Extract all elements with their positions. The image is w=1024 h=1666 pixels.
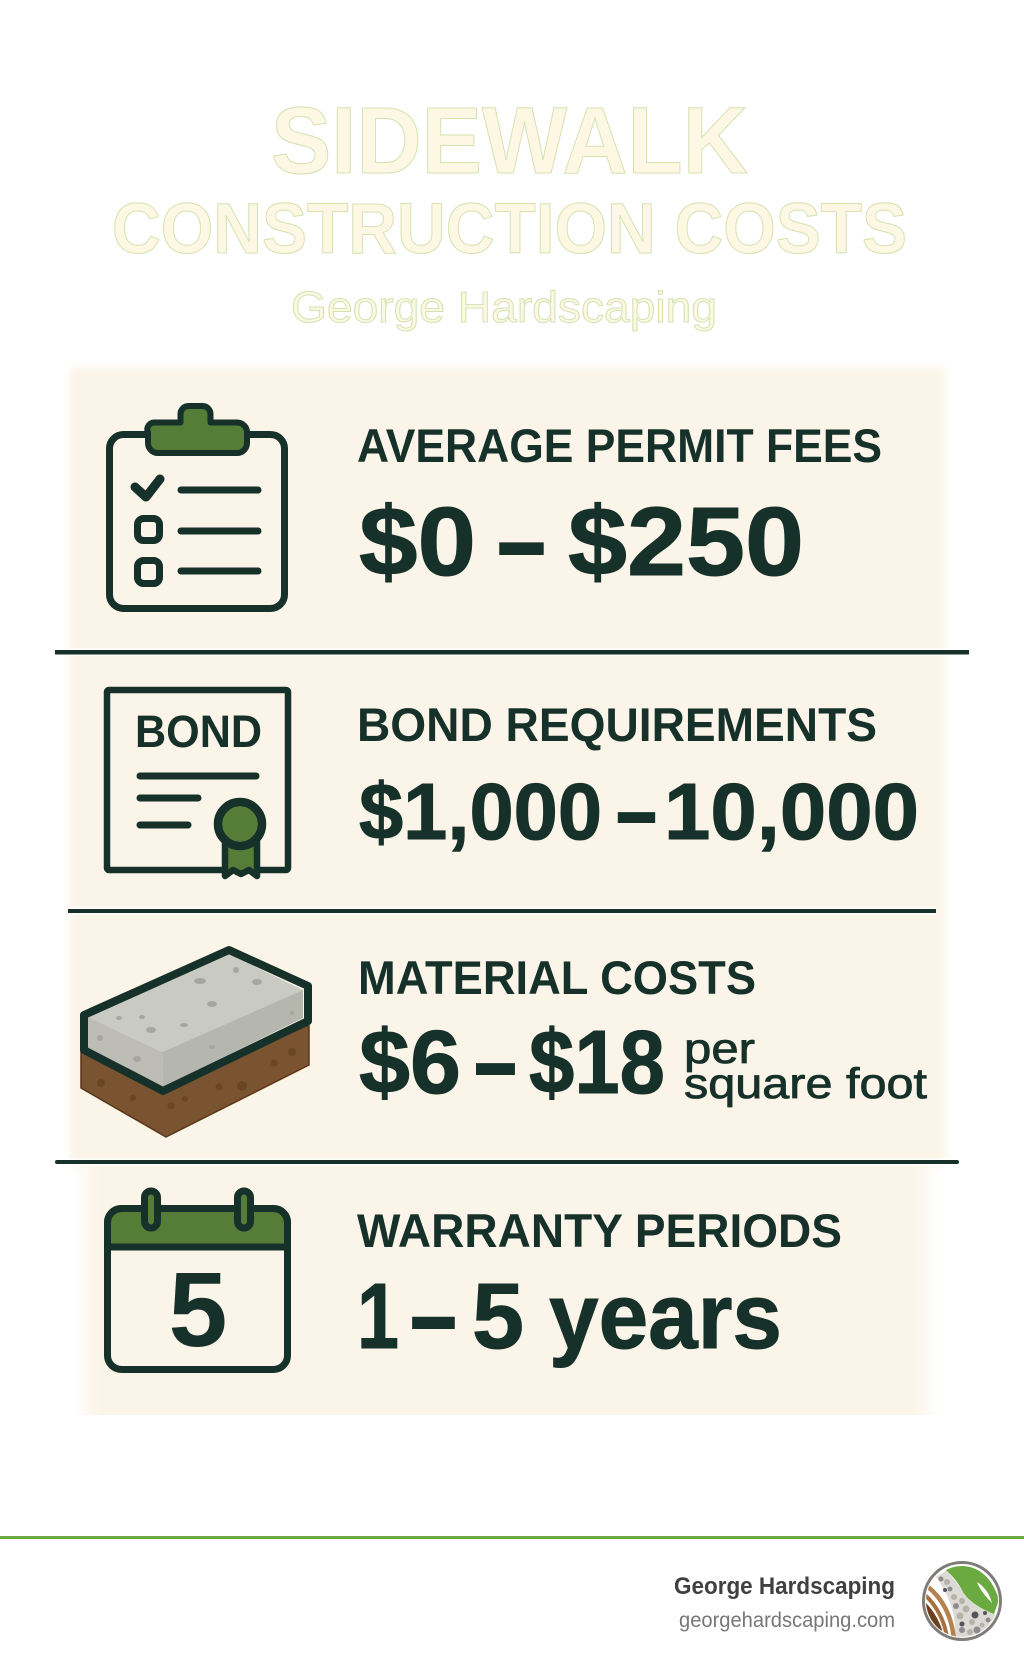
value: $1,000 – 10,000 (359, 767, 919, 856)
heading: warranty periods: WARRANTY PERIODS (357, 1204, 842, 1257)
value: 1 – 5 years (357, 1264, 782, 1368)
panel: bond requirements (107, 690, 919, 876)
heading: material costs: MATERIAL COSTS (358, 951, 756, 1004)
logo (923, 1562, 1000, 1640)
value: $6 – $18: $6 (359, 1013, 461, 1113)
divider 2 (68, 907, 936, 915)
heading: bond requirements: BOND REQUIREMENTS (357, 698, 877, 751)
panel: warranty periods (108, 1191, 842, 1370)
value: $1,000 – 10,000: $1,000 (359, 767, 602, 856)
value: 1 – 5 years: 1 (357, 1264, 399, 1368)
footer rule (0, 1536, 1024, 1539)
icon: concrete paver on soil (81, 950, 309, 1137)
divider 1 (55, 648, 969, 656)
unit: per square foot: square foot (684, 1060, 927, 1108)
calendar number: 5 (169, 1251, 227, 1369)
icon: calendar (108, 1191, 288, 1370)
panel: material costs (81, 950, 927, 1137)
value: $1,000 – 10,000: 10,000 (664, 767, 919, 856)
icon: bond certificate (107, 690, 288, 876)
icon: clipboard checklist (110, 406, 284, 608)
panel: average permit fees (110, 406, 882, 608)
subtitle: George Hardscaping (291, 283, 717, 332)
title line 2: CONSTRUCTION COSTS (112, 190, 907, 269)
bond label: BOND (135, 706, 262, 757)
value: $0 – $250: $250 (568, 487, 804, 596)
title (112, 88, 907, 332)
brand name: George Hardscaping (674, 1573, 895, 1600)
panel background (70, 368, 945, 1460)
value: 1 – 5 years: 5 (472, 1264, 524, 1368)
value: 1 – 5 years: years (549, 1264, 782, 1368)
brand url: georgehardscaping.com (679, 1609, 895, 1632)
value: $6 – $18: – (475, 1013, 516, 1113)
footer brand (674, 1573, 895, 1632)
value: $0 – $250: – (498, 487, 545, 596)
heading: average permit fees: AVERAGE PERMIT FEES (357, 419, 882, 472)
value: $0 – $250 (359, 487, 804, 596)
value: $0 – $250: $0 (359, 487, 476, 596)
value: $6 – $18 (359, 1013, 665, 1113)
value: 1 – 5 years: – (411, 1264, 456, 1368)
unit: per square foot (684, 1025, 927, 1108)
value: $6 – $18: $18 (529, 1013, 665, 1113)
title line 1: SIDEWALK (271, 88, 748, 194)
divider 3 (55, 1158, 959, 1166)
value: $1,000 – 10,000: – (617, 767, 656, 856)
unit: per square foot: per (684, 1025, 755, 1073)
